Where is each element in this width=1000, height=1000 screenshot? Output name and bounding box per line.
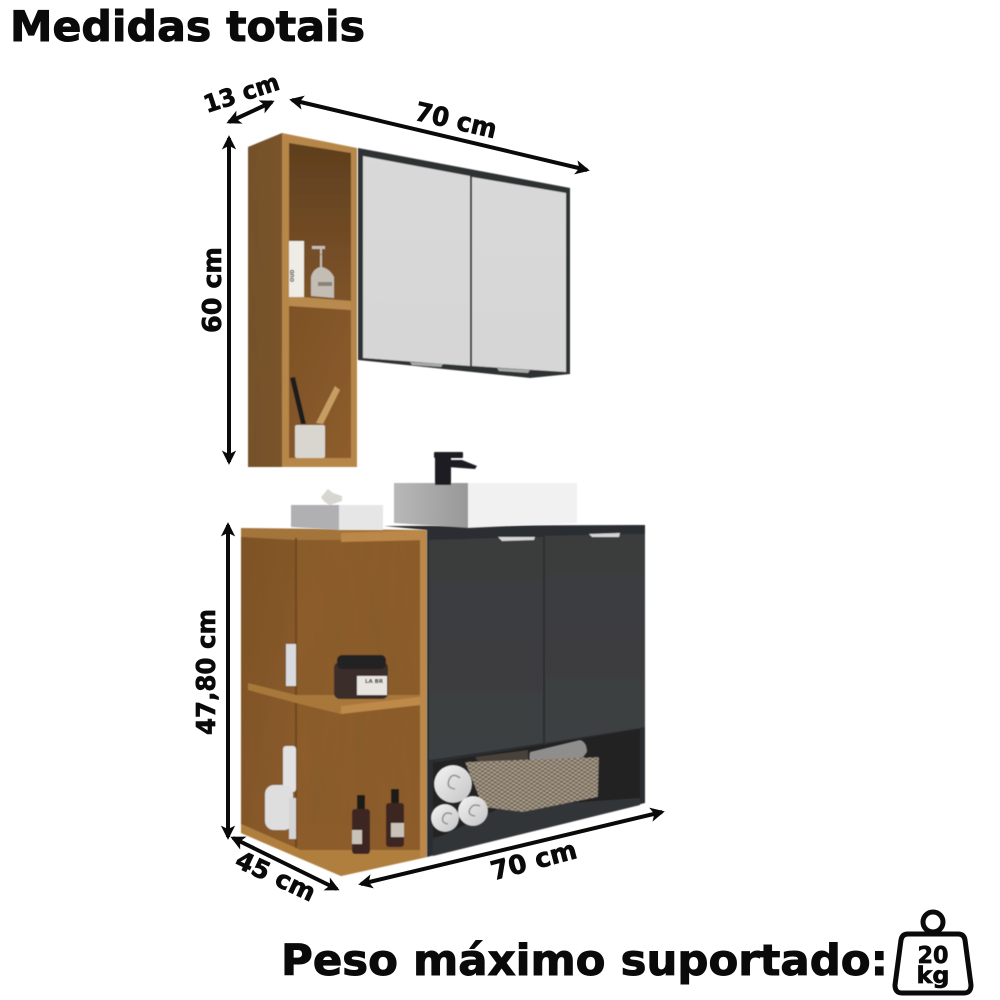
icon: 20 kg weight: kg bbox=[916, 963, 950, 989]
tissue box bbox=[291, 489, 383, 530]
right mirror door bbox=[472, 177, 566, 372]
shelf side panel bbox=[248, 133, 282, 467]
unit silhouette and top surface bbox=[241, 528, 427, 876]
lower compartment bbox=[289, 305, 351, 458]
dimension: top 70 cm: 70 cm bbox=[412, 97, 500, 145]
bottle right bbox=[386, 789, 404, 847]
icon: 20 kg weight: 20 bbox=[918, 943, 948, 969]
dimension: 60 cm: 60 cm bbox=[198, 247, 228, 333]
right door handle bbox=[497, 368, 530, 373]
wall shelf unit bbox=[248, 133, 357, 467]
vanity dark cabinet bbox=[384, 525, 645, 857]
bamboo toothbrush bbox=[316, 386, 340, 424]
dimension: bottom 70 cm bbox=[361, 812, 662, 887]
right back panel bbox=[297, 540, 420, 850]
cabinet body bbox=[384, 525, 645, 857]
middle shelf bbox=[248, 683, 420, 714]
faucet bbox=[434, 452, 477, 485]
box: OUD: OUD bbox=[290, 270, 296, 282]
shelf front frame bbox=[282, 133, 357, 467]
basket bbox=[465, 757, 599, 812]
post between panels bbox=[295, 538, 297, 848]
dimension: 47,80 cm: 47,80 cm bbox=[192, 609, 222, 735]
items in basket bbox=[475, 750, 528, 770]
wood grain on side bbox=[248, 150, 282, 467]
cream jar: LA BR bbox=[365, 679, 384, 685]
front edge of middle shelf bbox=[341, 697, 420, 714]
mirror cabinet bbox=[358, 148, 570, 378]
left back panel bbox=[241, 537, 296, 848]
left handle bbox=[498, 537, 535, 541]
cream jar bbox=[334, 655, 388, 699]
toothbrush bbox=[290, 377, 306, 424]
dimension: bottom 70 cm: 70 cm bbox=[488, 835, 580, 887]
box: OUD bbox=[289, 241, 304, 297]
right handle bbox=[589, 533, 620, 537]
soap dispenser bbox=[311, 246, 334, 298]
right edge post bbox=[420, 530, 427, 857]
sink bbox=[394, 452, 577, 528]
dimension: 45 cm: 45 cm bbox=[231, 845, 320, 907]
bottom shelf bbox=[241, 824, 427, 876]
middle shelf board bbox=[289, 296, 351, 310]
left mirror door bbox=[363, 156, 470, 366]
left door handle bbox=[410, 362, 443, 367]
title: Medidas totais bbox=[10, 2, 365, 51]
icon: 20 kg weight bbox=[895, 912, 971, 993]
bottle left bbox=[352, 795, 370, 854]
dimension: 13 cm: 13 cm bbox=[200, 68, 283, 119]
left door bbox=[429, 537, 543, 760]
top front edge bbox=[341, 530, 427, 542]
cup bbox=[295, 425, 325, 458]
upper compartment bbox=[289, 143, 351, 301]
toilet paper rolls bbox=[265, 746, 296, 839]
dimension: top 70 cm bbox=[292, 97, 587, 170]
open niche bbox=[433, 729, 640, 837]
sink left face bbox=[394, 483, 468, 528]
maximum weight label: Peso máximo suportado: bbox=[281, 936, 888, 986]
rolled towel in basket bbox=[529, 740, 587, 768]
niche floor bbox=[433, 798, 640, 856]
vanity wood side unit bbox=[241, 528, 427, 876]
storage basket with towels bbox=[431, 740, 599, 832]
wood grain bbox=[241, 540, 420, 825]
right door bbox=[545, 534, 645, 743]
towel rolls bbox=[431, 765, 488, 832]
roll upper bbox=[286, 644, 296, 686]
sink right face bbox=[468, 483, 577, 528]
cabinet frame bbox=[358, 148, 570, 378]
